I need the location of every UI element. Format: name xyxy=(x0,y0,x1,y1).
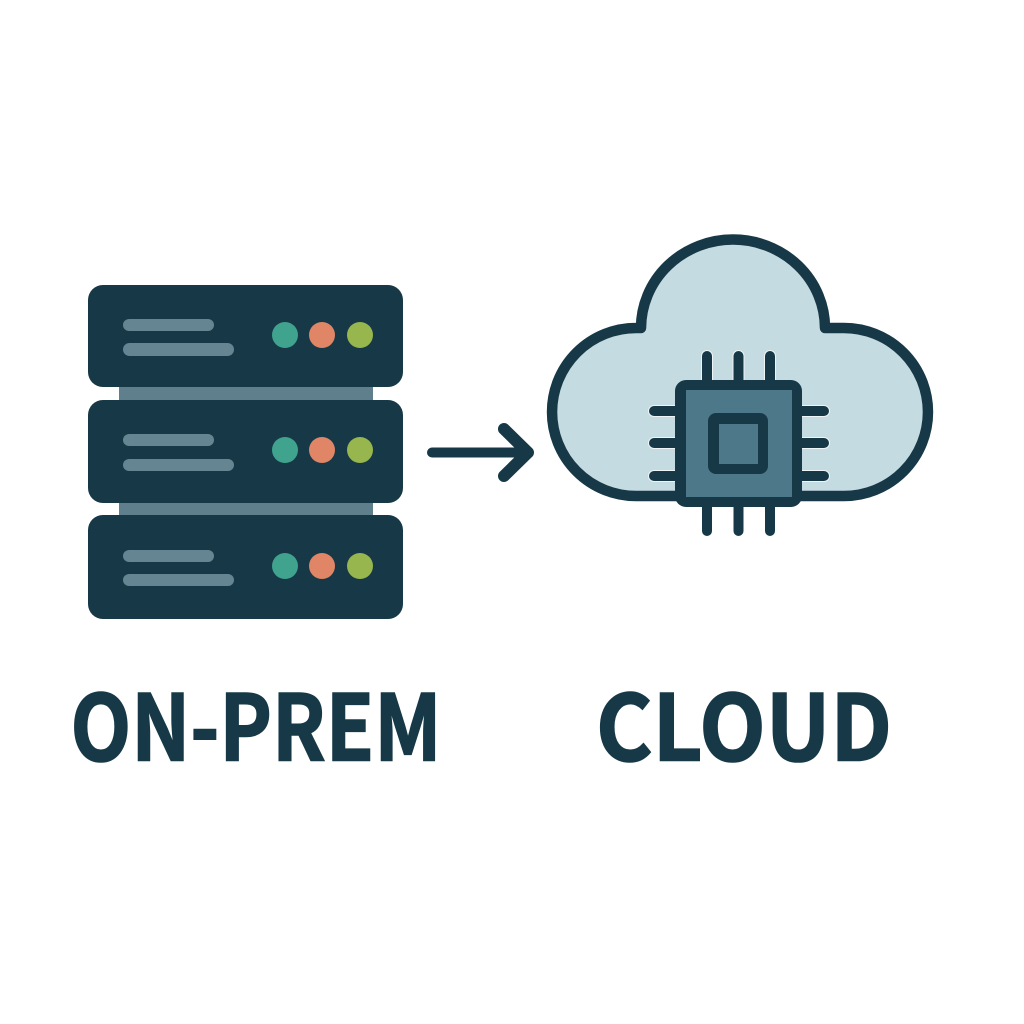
arrow: on-prem to cloud xyxy=(432,429,528,476)
label: cloud: CLOUD xyxy=(596,656,892,788)
server unit: bottom xyxy=(88,515,403,619)
server unit: top xyxy=(88,285,403,387)
rack connector: upper xyxy=(119,385,373,402)
chip core xyxy=(708,413,768,474)
chip face xyxy=(686,390,792,497)
chip pins xyxy=(654,356,824,531)
rack connector: lower xyxy=(119,501,373,517)
chip core centre xyxy=(719,424,758,464)
icon: cloud xyxy=(552,240,928,496)
icon: processor chip xyxy=(654,356,824,531)
icon: server stack xyxy=(88,285,403,619)
label: on-prem: ON-PREM xyxy=(70,656,442,788)
server unit: middle xyxy=(88,400,403,503)
chip body xyxy=(675,380,802,507)
